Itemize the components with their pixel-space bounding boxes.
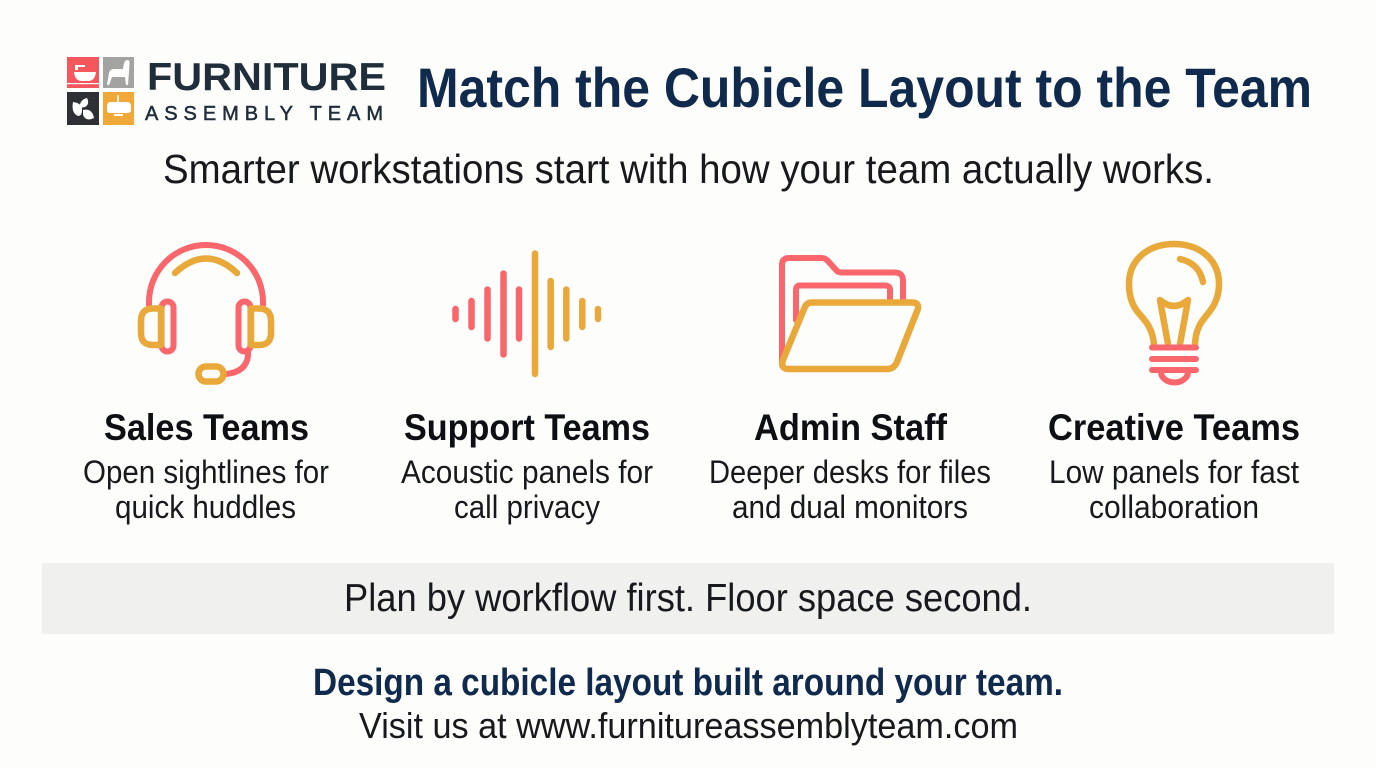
logo wordmark: FURNITURE <box>147 56 386 99</box>
logo tile: red sink <box>67 57 99 88</box>
description: support teams: Acoustic panels for <box>401 454 653 490</box>
logo tile: gray chair <box>103 57 134 88</box>
icon: light bulb <box>1129 244 1219 383</box>
heading: sales teams: Sales Teams <box>104 407 309 448</box>
panel: support teams <box>401 254 653 525</box>
description: creative teams <box>1049 454 1299 525</box>
callout band: Plan by workflow first. Floor space second. <box>344 577 1032 620</box>
description: creative teams: collaboration <box>1089 489 1259 525</box>
description: support teams: call privacy <box>454 489 600 525</box>
panel: creative teams <box>1048 244 1300 525</box>
description: admin staff: and dual monitors <box>732 489 968 525</box>
panel: sales teams <box>83 245 329 525</box>
call to action: Design a cubicle layout built around your team. <box>313 662 1063 704</box>
icon: folder <box>782 258 918 369</box>
description: creative teams: Low panels for fast <box>1049 454 1299 490</box>
logo tile: dark leaves <box>67 92 99 125</box>
description: admin staff <box>709 454 991 525</box>
description: admin staff: Deeper desks for files <box>709 454 991 490</box>
description: support teams <box>401 454 653 525</box>
heading: support teams: Support Teams <box>404 407 650 448</box>
icon: sound wave <box>456 254 598 374</box>
panel: admin staff <box>709 258 991 525</box>
subtitle: Smarter workstations start with how your team actually works. <box>163 146 1214 192</box>
description: sales teams <box>83 454 329 525</box>
description: sales teams: Open sightlines for <box>83 454 329 490</box>
call to action <box>313 662 1063 746</box>
logo: Furniture Assembly Team <box>67 56 386 125</box>
logo tagline: ASSEMBLY TEAM <box>145 103 383 125</box>
logo tile: orange lamp <box>103 92 134 125</box>
heading: admin staff: Admin Staff <box>754 407 948 448</box>
callout band <box>42 563 1334 634</box>
icon: headset <box>141 245 271 382</box>
description: sales teams: quick huddles <box>115 489 296 525</box>
heading: creative teams: Creative Teams <box>1048 407 1300 448</box>
call to action: Visit us at www.furnitureassemblyteam.com <box>359 705 1018 746</box>
